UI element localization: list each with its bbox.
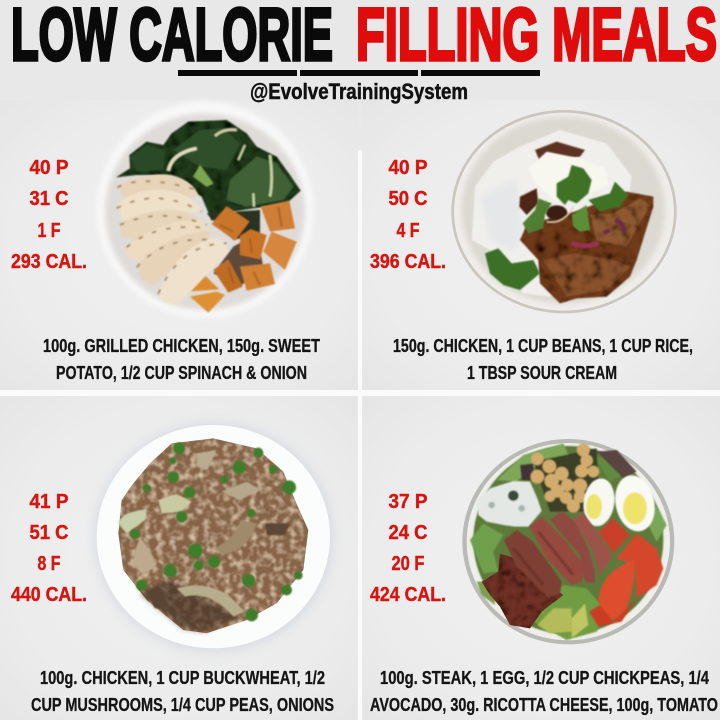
chili [519, 142, 653, 303]
meal 1 plate: chicken, sweet potato, spinach [97, 102, 313, 318]
tomatoes [589, 518, 663, 627]
buckwheat [118, 438, 308, 633]
cilantro [485, 165, 628, 290]
steak slices [504, 511, 613, 598]
macros: meal 4: 424 CAL. [370, 584, 446, 606]
macros: meal 2: 396 CAL. [370, 251, 446, 273]
caption: meal 2: 1 TBSP SOUR CREAM [467, 363, 617, 383]
macros: meal 3: 51 C [30, 522, 68, 544]
avocado [537, 603, 588, 638]
divider: vertical [358, 150, 362, 720]
macros: meal 2: 4 F [396, 220, 420, 242]
peas [130, 442, 303, 621]
caption: meal 1: 100g. GRILLED CHICKEN, 150g. SWEET [43, 336, 320, 356]
bowl [95, 422, 333, 652]
grain shade [140, 580, 243, 632]
spinach [116, 120, 301, 221]
title underline bars [178, 70, 540, 76]
chickpeas [530, 443, 599, 513]
macros: meal 2: 50 C [388, 188, 428, 210]
plate [97, 102, 313, 318]
meal 4 bowl: steak salad [462, 439, 674, 644]
caption: meal 1 [43, 336, 320, 383]
caption: meal 3 [31, 668, 334, 715]
meal 3 bowl: buckwheat, mushrooms, peas [95, 422, 333, 652]
macros: meal 3: 440 CAL. [11, 584, 87, 606]
divider: horizontal [0, 390, 720, 396]
macros: meal 3: 41 P [30, 491, 68, 513]
sweet potato cubes [186, 201, 297, 313]
macros: meal 1: 293 CAL. [11, 251, 87, 273]
panel: bottom-right background [362, 396, 720, 720]
macros: meal 3: 8 F [38, 553, 60, 575]
macros: meal 1: 40 P [30, 157, 68, 179]
macros: meal 1: 1 F [38, 220, 60, 242]
panel: bottom-left background [0, 396, 358, 720]
ricotta cheese [477, 481, 542, 527]
rice [472, 130, 632, 297]
caption: meal 3: CUP MUSHROOMS, 1/4 CUP PEAS, ONIONS [31, 695, 334, 715]
caption: meal 1: POTATO, 1/2 CUP SPINACH & ONION [56, 363, 307, 383]
caption: meal 3: 100g. CHICKEN, 1 CUP BUCKWHEAT, 1/2 [40, 668, 325, 688]
panel: top-left background [0, 100, 358, 390]
macros: meal 2 [370, 157, 446, 273]
lettuce [470, 443, 667, 640]
macros: meal 4: 37 P [388, 491, 428, 513]
macros: meal 2: 40 P [388, 157, 428, 179]
macros: meal 4 [370, 491, 446, 606]
title [11, 0, 717, 76]
sour cream [528, 152, 608, 202]
hard boiled eggs [580, 472, 660, 535]
macros: meal 1: 31 C [30, 188, 68, 210]
macros: meal 4: 24 C [388, 522, 428, 544]
bowl [451, 110, 677, 313]
rice shading [480, 177, 523, 253]
caption: meal 4 [370, 668, 718, 715]
panel: top-right background [362, 100, 720, 390]
salad base [473, 446, 663, 634]
macros: meal 4: 20 F [392, 553, 424, 575]
bowl [462, 439, 674, 644]
caption: meal 2 [393, 336, 693, 383]
macros: meal 3 [11, 491, 87, 606]
chicken slices [115, 175, 228, 305]
meal 2 bowl: chili, rice, sour cream [451, 110, 677, 313]
onions and mushrooms [118, 450, 290, 617]
handle: @EvolveTrainingSystem [250, 79, 468, 104]
macros: meal 1 [11, 157, 87, 273]
bacon [482, 553, 563, 628]
